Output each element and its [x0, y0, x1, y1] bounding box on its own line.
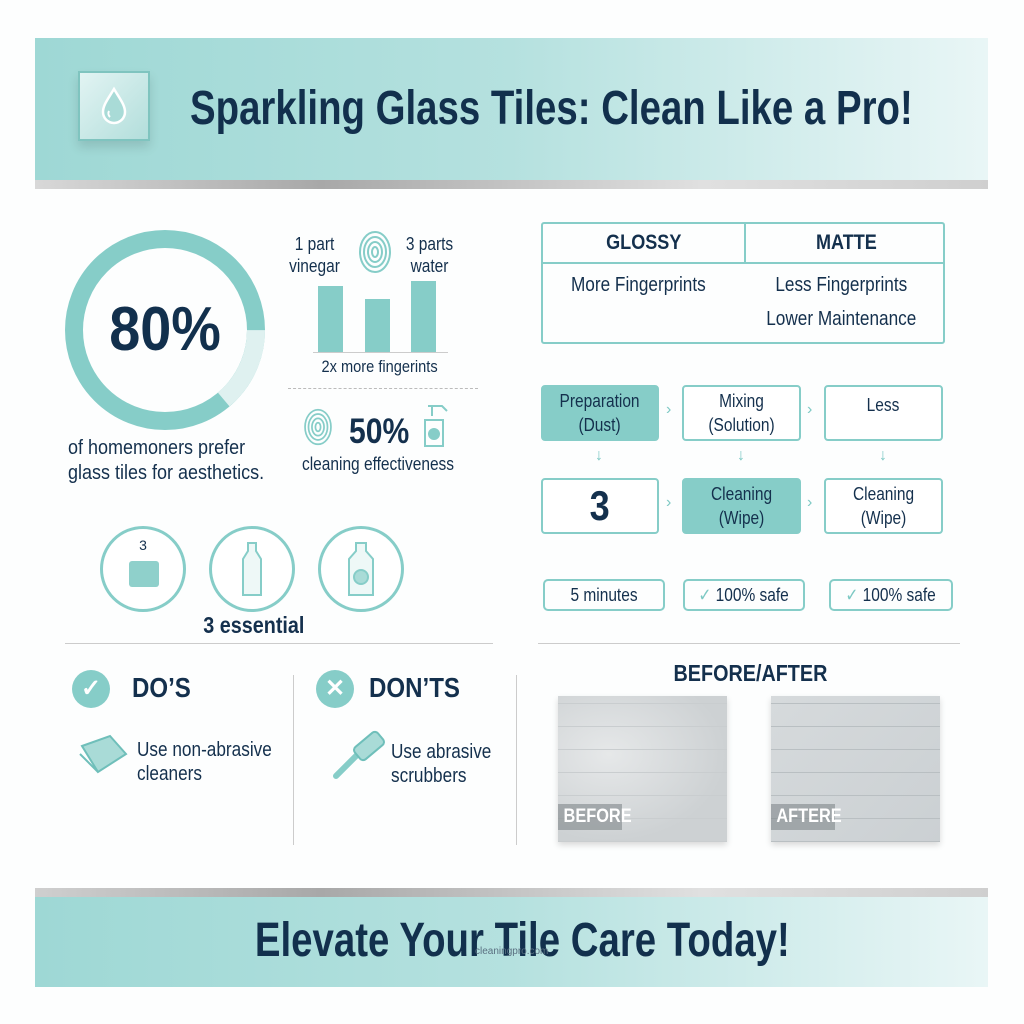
image: before tiles: BEFORE	[564, 806, 632, 827]
dos: cleaners	[137, 763, 202, 785]
comparison table glossy vs matte: MATTE	[816, 231, 876, 254]
stat: 50% cleaning effectiveness: 50%	[349, 412, 409, 451]
dos: ✓	[81, 675, 101, 702]
comparison table glossy vs matte: More Fingerprints	[571, 274, 705, 296]
icon: fingerprint	[359, 231, 391, 273]
process flow: (Dust)	[579, 415, 621, 435]
donut chart 80%: 80%	[109, 295, 221, 364]
donts: Use abrasive	[391, 741, 491, 763]
donut chart 80%	[65, 230, 265, 430]
dos: Use non-abrasive	[137, 739, 272, 761]
process flow: ›	[807, 494, 812, 511]
text: ✓ 100% safe	[699, 585, 789, 605]
process flow: Mixing	[719, 391, 764, 411]
bar chart: vinegar/water: water	[411, 256, 449, 276]
process flow: ›	[666, 494, 671, 511]
process flow: 3	[590, 482, 610, 529]
footer banner	[35, 888, 988, 987]
process flow: (Solution)	[708, 415, 775, 435]
process flow: ›	[666, 401, 671, 418]
donts: scrubbers	[391, 765, 467, 787]
donts: ✕	[325, 675, 345, 702]
icon: cleaner bottle	[318, 526, 404, 612]
title: Sparkling Glass Tiles: Clean Like a Pro!	[190, 82, 913, 135]
pills	[543, 579, 665, 611]
image: after tiles	[771, 696, 940, 842]
comparison table glossy vs matte: GLOSSY	[606, 231, 681, 254]
icon: glass tile with drop	[78, 71, 150, 141]
comparison table glossy vs matte: Less Fingerprints	[775, 274, 907, 296]
header banner	[35, 38, 988, 189]
donut caption: of homemoners prefer	[68, 437, 245, 459]
process flow: ↓	[595, 447, 603, 464]
bar chart: vinegar/water: vinegar	[290, 256, 340, 276]
bar chart: vinegar/water: 3 parts	[406, 234, 454, 254]
process flow: Preparation	[560, 391, 640, 411]
donts: DON’TS	[369, 672, 460, 703]
process flow: ↓	[879, 447, 887, 464]
pills: 5 minutes	[570, 585, 638, 605]
donts	[316, 670, 491, 787]
comparison table glossy vs matte: Lower Maintenance	[766, 308, 916, 330]
footer banner: Elevate Your Tile Care Today!	[255, 914, 790, 967]
stat: 50% cleaning effectiveness: cleaning effectiveness	[302, 454, 454, 474]
text: ✓ 100% safe	[846, 585, 936, 605]
icon: bottle	[209, 526, 295, 612]
footer banner: cleaningpro.com	[475, 946, 548, 957]
image: after tiles: AFTERE	[776, 806, 842, 827]
before/after: BEFORE/AFTER	[673, 660, 827, 686]
process flow: (Wipe)	[719, 508, 764, 528]
donut caption: glass tiles for aesthetics.	[68, 462, 264, 484]
comparison table glossy vs matte	[541, 222, 945, 344]
dos	[72, 670, 272, 785]
process flow: Cleaning	[711, 484, 772, 504]
essentials circles	[100, 526, 404, 638]
process flow: ›	[807, 401, 812, 418]
bar chart: vinegar/water: 2x more fingerints	[322, 357, 438, 376]
process flow: Cleaning	[853, 484, 914, 504]
before/after	[556, 660, 942, 848]
dos: DO’S	[132, 672, 191, 703]
process flow: ↓	[737, 447, 745, 464]
process flow: Less	[867, 395, 900, 415]
process flow	[541, 385, 943, 534]
icon: sponge cloth: 3	[139, 537, 147, 553]
image: before tiles	[558, 696, 727, 842]
icon: sponge cloth	[100, 526, 186, 612]
bar chart: vinegar/water	[289, 231, 454, 376]
stat: 50% cleaning effectiveness	[302, 405, 454, 474]
process flow: (Wipe)	[861, 508, 906, 528]
essentials circles: 3 essential	[203, 612, 305, 638]
donut caption	[68, 437, 264, 484]
bar chart: vinegar/water: 1 part	[295, 234, 335, 254]
